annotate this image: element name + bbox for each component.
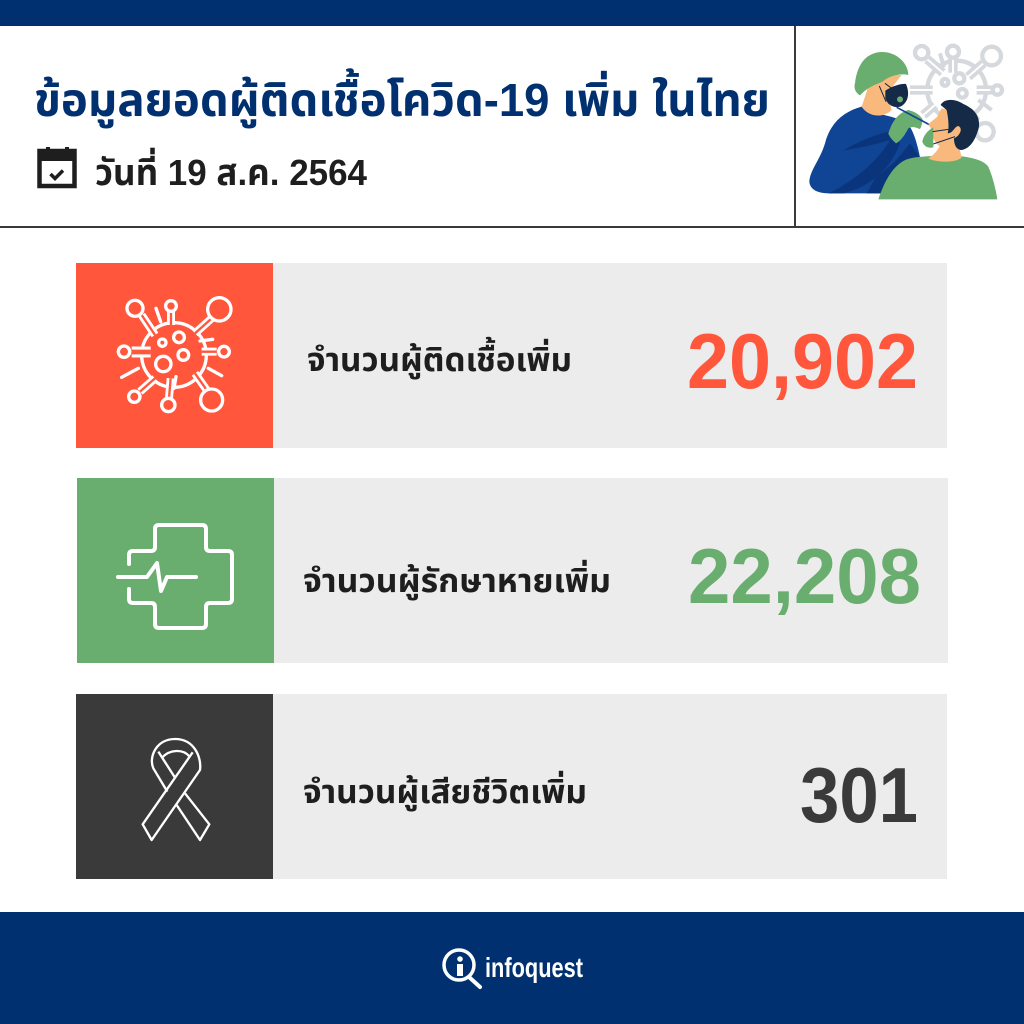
patient shirt — [878, 156, 997, 199]
number: deaths: 301 — [800, 751, 918, 839]
title: ข้อมูลยอดผู้ติดเชื้อโควิด-19 เพิ่ม ในไทย — [34, 68, 770, 128]
patient neck and face — [928, 140, 962, 162]
footer band — [0, 912, 1024, 1024]
panel: deaths — [76, 694, 947, 879]
icon: ribbon — [143, 739, 209, 840]
label: deaths: จำนวนผู้เสียชีวิตเพิ่ม — [303, 770, 587, 812]
icon: virus — [118, 298, 231, 412]
label: recoveries: จำนวนผู้รักษาหายเพิ่ม — [303, 559, 611, 601]
surgical cap — [854, 52, 908, 95]
illustration: swab test — [809, 46, 1002, 199]
panel: new infections — [76, 263, 947, 448]
label: new infections: จำนวนผู้ติดเชื้อเพิ่ม — [307, 336, 572, 380]
gloved hand — [888, 110, 923, 143]
health worker neck and face — [862, 73, 902, 116]
black respirator — [885, 84, 908, 107]
date: วันที่ 19 ส.ค. 2564 — [95, 147, 367, 193]
number: recoveries: 22,208 — [688, 532, 921, 620]
health worker gown — [809, 107, 920, 193]
top header band — [0, 0, 1024, 26]
patient mask — [922, 127, 933, 148]
logo: infoquest: infoquest — [485, 952, 583, 983]
icon: medical cross with pulse — [118, 525, 232, 628]
panel: recoveries — [77, 478, 948, 663]
logo: infoquest — [444, 950, 583, 987]
swab — [897, 107, 930, 125]
number: new infections: 20,902 — [687, 317, 918, 405]
icon: calendar — [38, 147, 76, 186]
virus background — [910, 46, 1002, 140]
patient hair — [941, 100, 979, 150]
